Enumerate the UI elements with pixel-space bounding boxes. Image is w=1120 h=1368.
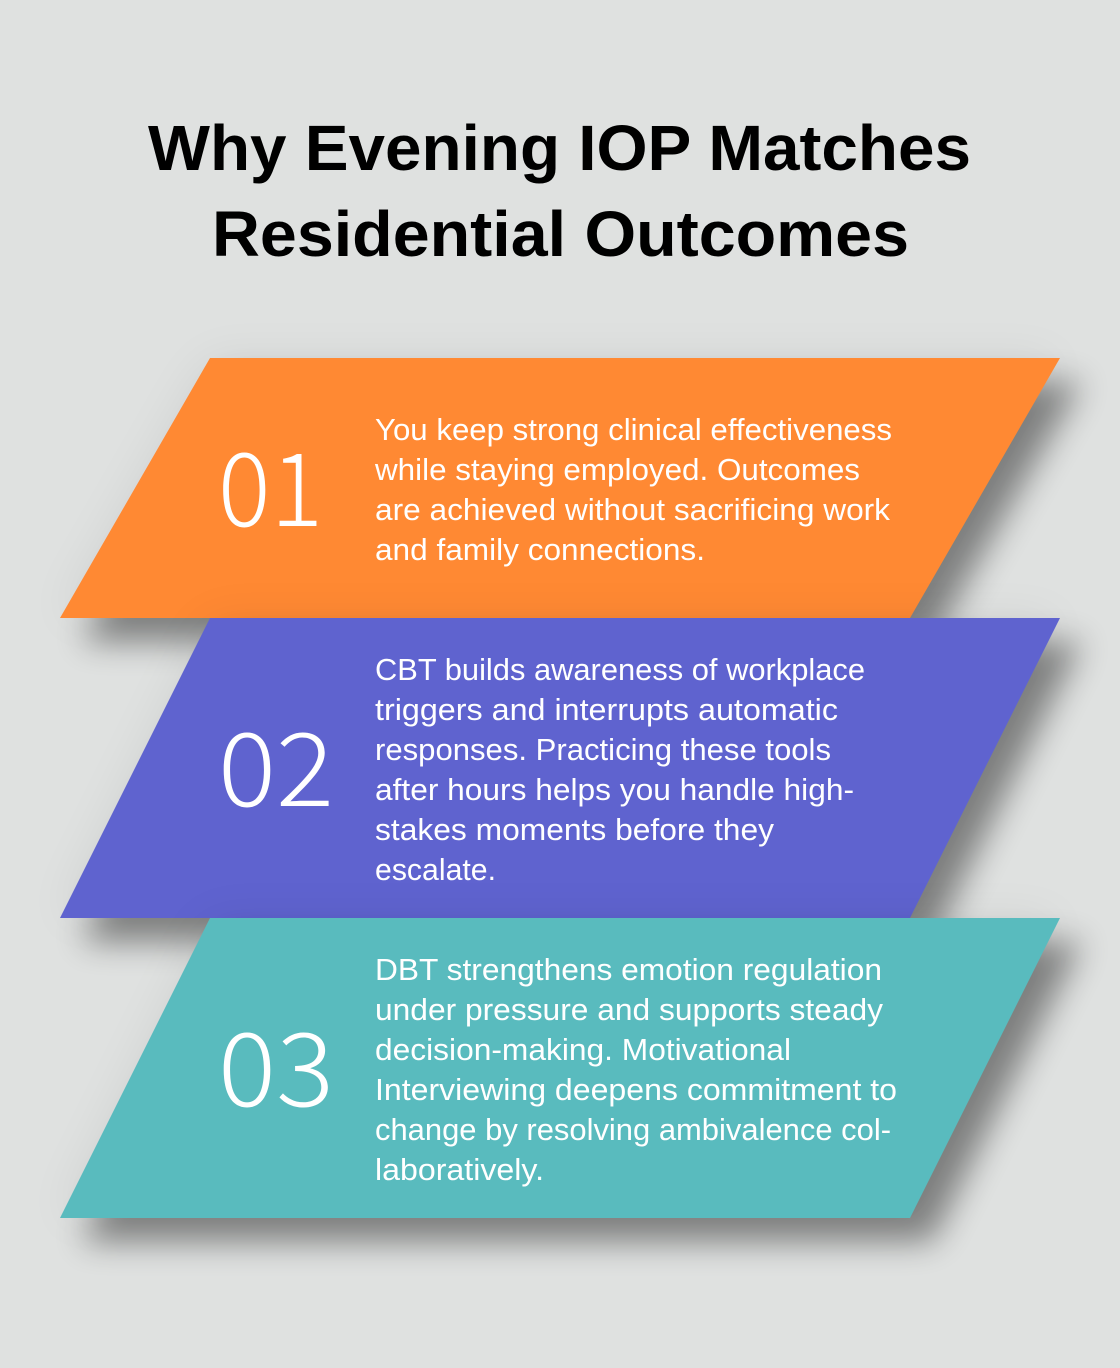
text block: step 02: responses. Practicing these tools bbox=[375, 732, 831, 767]
text block: step 01: You keep strong clinical effectiveness bbox=[375, 412, 892, 447]
text block: step 01 bbox=[374, 412, 892, 567]
text block: step 02: escalate. bbox=[375, 852, 496, 887]
text block: step 03: decision-making. Motivational bbox=[375, 1032, 791, 1067]
panel: step 03 teal bbox=[60, 918, 1060, 1218]
number 02: 02 bbox=[218, 689, 334, 836]
text block: step 01: and family connections. bbox=[375, 532, 705, 567]
text block: step 03: Interviewing deepens commitment to bbox=[375, 1072, 897, 1107]
panel: step 01 orange bbox=[60, 358, 1060, 618]
number 01: 01 bbox=[218, 409, 323, 556]
text block: step 02: after hours helps you handle high- bbox=[375, 772, 854, 807]
title bbox=[148, 112, 971, 270]
text block: step 03: under pressure and supports steady bbox=[375, 992, 884, 1027]
text block: step 02: stakes moments before they bbox=[375, 812, 774, 847]
text block: step 02: triggers and interrupts automatic bbox=[375, 692, 838, 727]
panel: step 02 purple bbox=[60, 618, 1060, 918]
text block: step 03 bbox=[375, 952, 897, 1187]
text block: step 03: change by resolving ambivalence col- bbox=[375, 1112, 891, 1147]
title: Why Evening IOP Matches bbox=[148, 112, 971, 184]
text block: step 01: while staying employed. Outcomes bbox=[374, 452, 860, 487]
number 03: 03 bbox=[218, 989, 334, 1136]
text block: step 03: DBT strengthens emotion regulation bbox=[375, 952, 882, 987]
title: Residential Outcomes bbox=[212, 198, 909, 270]
text block: step 02: CBT builds awareness of workplace bbox=[375, 652, 865, 687]
text block: step 02 bbox=[375, 652, 865, 887]
text block: step 01: are achieved without sacrificing work bbox=[375, 492, 891, 527]
text block: step 03: laboratively. bbox=[375, 1152, 544, 1187]
